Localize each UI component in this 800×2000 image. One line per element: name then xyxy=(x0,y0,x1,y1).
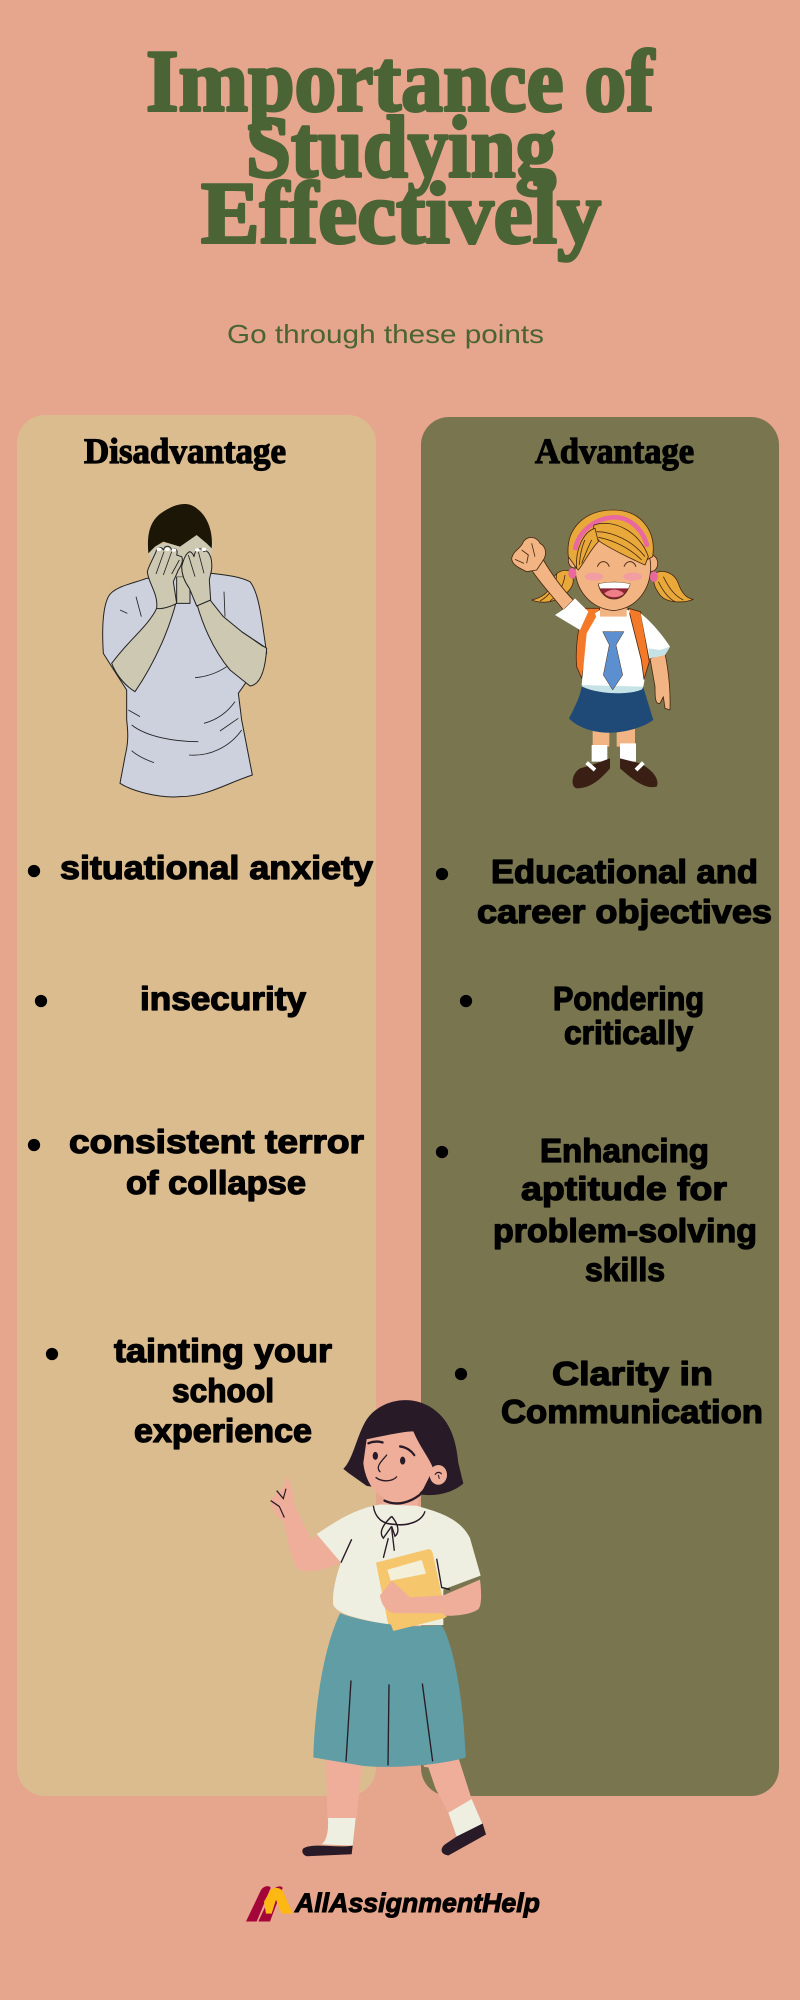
bullet item: tainting your school experience: school xyxy=(172,1372,274,1409)
title xyxy=(146,34,656,262)
bullet item: consistent terror of collapse: consistent terror xyxy=(69,1123,364,1160)
icon: happy schoolgirl with raised fist xyxy=(512,510,693,788)
title: Importance of xyxy=(146,34,656,130)
advantage list xyxy=(436,853,772,1430)
bullet item: enhancing aptitude xyxy=(436,1132,757,1288)
bullet item: enhancing aptitude: aptitude for xyxy=(521,1170,727,1207)
bullet item: enhancing aptitude: Enhancing xyxy=(540,1132,709,1169)
subtitle: Go through these points xyxy=(227,319,544,349)
disadvantage list xyxy=(28,849,374,1449)
bullet item: educational and career objectives: Educational and xyxy=(491,853,758,890)
bullet item: clarity in communication xyxy=(456,1355,763,1430)
title: Studying xyxy=(246,100,556,196)
bullet item: pondering critically: Pondering xyxy=(553,980,704,1017)
bullet item: enhancing aptitude: problem-solving xyxy=(493,1212,757,1249)
bullet item: enhancing aptitude: skills xyxy=(585,1251,665,1288)
bullet item: educational and career objectives: career objectives xyxy=(477,893,772,930)
logo mark xyxy=(246,1886,293,1922)
panel: advantage xyxy=(421,417,779,1796)
bullet item: insecurity: insecurity xyxy=(140,980,307,1017)
bullet item: tainting your school experience xyxy=(46,1332,332,1449)
logo wordmark: AllAssignmentHelp xyxy=(294,1888,540,1918)
bullet item: situational anxiety: situational anxiety xyxy=(60,849,374,886)
bullet item: tainting your school experience: tainting your xyxy=(114,1332,332,1369)
bullet item: pondering critically: critically xyxy=(564,1014,694,1051)
heading: advantage: Advantage xyxy=(535,431,694,471)
panel: disadvantage xyxy=(17,415,376,1796)
icon: man covering his face xyxy=(103,504,267,797)
bullet item: clarity in communication: Communication xyxy=(501,1393,763,1430)
bullet item: consistent terror of collapse: of collapse xyxy=(126,1164,306,1201)
bullet item: clarity in communication: Clarity in xyxy=(552,1355,713,1392)
bullet item: tainting your school experience: experience xyxy=(134,1412,312,1449)
bullet item: consistent terror of collapse xyxy=(28,1123,364,1201)
bullet item: insecurity xyxy=(36,980,307,1017)
logo xyxy=(246,1886,540,1922)
heading: disadvantage: Disadvantage xyxy=(84,431,286,471)
bullet item: pondering critically xyxy=(460,980,704,1051)
illustration: girl holding a notebook xyxy=(271,1400,486,1856)
bullet item: educational and career objectives xyxy=(436,853,772,930)
title: Effectively xyxy=(201,166,601,262)
